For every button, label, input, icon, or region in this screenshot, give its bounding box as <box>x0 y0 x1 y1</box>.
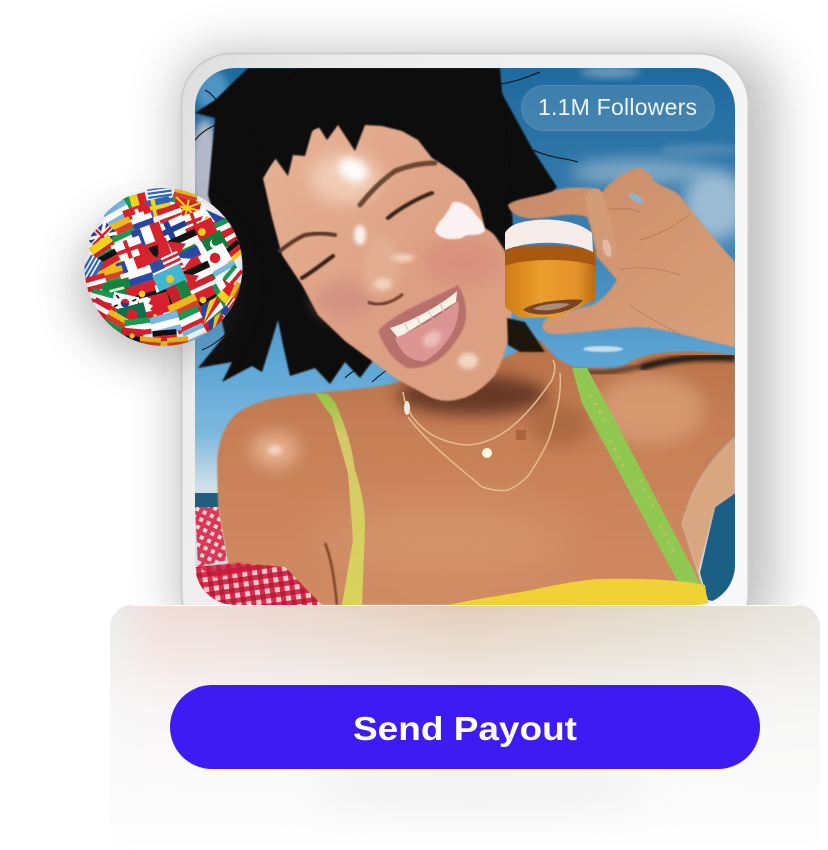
followers badge <box>522 86 714 130</box>
hand <box>508 168 735 347</box>
body shading <box>251 357 735 605</box>
gingham cloth <box>195 507 322 605</box>
hair back <box>195 68 557 384</box>
hair strands <box>195 72 578 382</box>
cream on cheek <box>435 202 485 239</box>
straps <box>315 368 700 605</box>
face <box>263 118 512 401</box>
mouth <box>378 285 466 368</box>
send payout button <box>170 685 760 769</box>
phone card shadow <box>176 50 776 640</box>
eyes <box>302 193 432 278</box>
pinching finger <box>585 188 610 232</box>
photo: woman holding jar <box>191 66 747 605</box>
sky <box>191 66 747 605</box>
jar <box>505 220 596 318</box>
neck and body <box>217 340 735 605</box>
sea <box>195 493 735 605</box>
phone frame <box>182 54 748 644</box>
hand details <box>603 207 690 335</box>
icon: flag globe <box>84 188 242 346</box>
bottom panel <box>110 605 820 814</box>
necklaces <box>403 360 560 491</box>
dark hair under jar <box>507 318 545 352</box>
eyebrows <box>280 163 435 251</box>
followers badge: 1.1M Followers <box>538 94 697 120</box>
send payout button: Send Payout <box>353 710 577 747</box>
globe shadow <box>78 213 222 357</box>
hand gap <box>628 193 644 203</box>
yellow top <box>448 579 708 605</box>
inner arm <box>682 437 735 573</box>
face shading <box>310 153 500 369</box>
fringe <box>255 68 515 250</box>
fingernail <box>602 239 612 257</box>
